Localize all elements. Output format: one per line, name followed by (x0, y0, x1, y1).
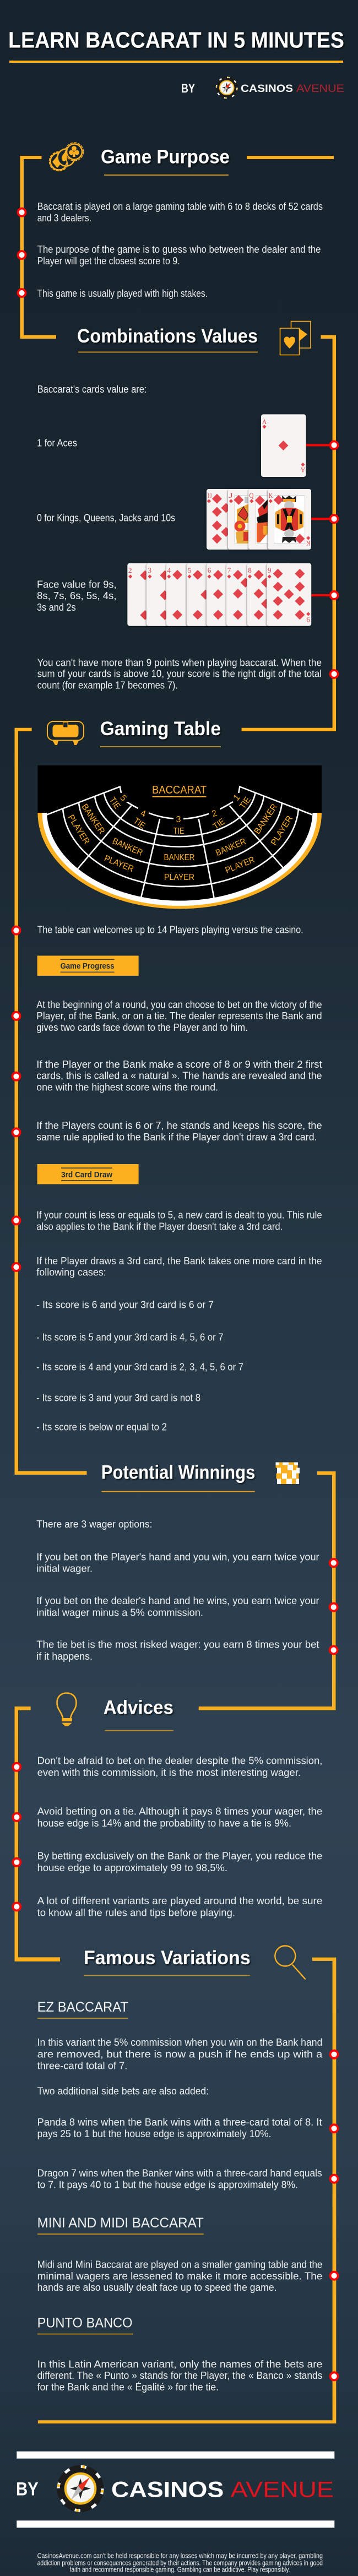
marker (13, 1903, 20, 1911)
table labels: TIE (173, 827, 185, 836)
paragraph: high stakes: This game is usually played with high stakes. (37, 288, 208, 299)
paragraph: nine points maximum: count (for example 17 becomes 7). (37, 680, 178, 691)
paragraph: variants (37, 1895, 322, 1919)
marker (330, 441, 338, 449)
paragraph: mini and midi rules (37, 2259, 322, 2293)
paragraph: beginning of a round: gives two cards face down to the Player and to him. (36, 1022, 248, 1033)
timeline frame: gaming table (14, 728, 87, 1475)
paragraph: bet on the dealer: Don't be afraid to bet on the dealer despite the 5% commission, (37, 1755, 322, 1766)
paragraph: dealer bet (36, 1595, 319, 1618)
panel: gaming table (12, 718, 322, 1475)
paragraph: panda 8: Panda 8 wins when the Bank wins with a three-card total of 8. It (37, 2117, 322, 2128)
footer logo band (16, 2452, 334, 2528)
marker (13, 1858, 20, 1866)
text: number cards: 3s and 2s (37, 602, 76, 613)
cards: ten, jack, queen, king of diamonds: 10 (207, 491, 211, 499)
text: number cards (37, 579, 117, 613)
cards: two to nine of diamonds: 5 (188, 566, 192, 574)
paragraph: variants: to know all the rules and tips before playing. (37, 1907, 235, 1919)
cards: two to nine of diamonds: 3 (148, 566, 151, 574)
cards: two to nine of diamonds (127, 563, 311, 626)
paragraph: dealer bet: initial wager minus a 5% commission. (36, 1607, 203, 1618)
timeline frame: combinations values (242, 335, 336, 731)
paragraph: avoid ties: house edge is 14% and the probability to have a tie is 9%. (37, 1818, 291, 1829)
subheading: punto banco: PUNTO BANCO (37, 2316, 132, 2331)
icon: poker chips (50, 143, 84, 171)
table labels: 4 (139, 808, 147, 819)
paragraph: mini and midi rules: minimal wagers are lessened to make it more accessible. The (37, 2270, 322, 2281)
paragraph: mini and midi rules: hands are also usually dealt face up to speed the game. (37, 2282, 276, 2293)
paragraph: house edge: By betting exclusively on the Bank or the Player, you reduce the (37, 1850, 322, 1861)
paragraph: table and decks: Baccarat is played on a large gaming table with 6 to 8 decks of 52 cards (37, 201, 323, 212)
paragraph: bank third card (36, 1256, 322, 1278)
paragraph: nine points maximum: You can't have more than 9 points when playing baccarat. When the (37, 657, 322, 668)
cards: two to nine of diamonds: 8 (248, 566, 252, 574)
footer logo band: AVENUE (231, 2477, 334, 2502)
icon: light bulb (57, 1693, 76, 1726)
paragraph: stand on six or seven: same rule applied to the Bank if the Player don't draw a 3rd card. (36, 1132, 317, 1143)
paragraph: player bet: initial wager. (36, 1563, 93, 1574)
marker (18, 289, 25, 297)
panel: combinations values (37, 322, 338, 731)
paragraph: punto banco rules: for the Bank and the « Égalité » for the tie. (37, 2382, 219, 2393)
card: ace of diamonds: A (300, 466, 305, 474)
paragraph: count five or less: also applies to the Bank if the Player doesn't take a 3rd card. (36, 1221, 283, 1232)
cards: two to nine of diamonds: 2 (128, 566, 132, 574)
marker (12, 1073, 20, 1080)
paragraph: mini and midi rules: Midi and Mini Baccarat are played on a smaller gaming table and the (37, 2259, 322, 2270)
button: game progress (37, 956, 139, 976)
paragraph: tie bet: The tie bet is the most risked wager: you earn 8 times your bet (36, 1639, 319, 1650)
table labels: TIE (211, 817, 227, 832)
paragraph: purpose: The purpose of the game is to guess who between the dealer and the (37, 244, 321, 255)
paragraph: punto banco rules: In this Latin American variant, only the names of the bets are (37, 2358, 322, 2370)
cards: two to nine of diamonds: 7 (227, 566, 231, 574)
timeline frame: game purpose (20, 156, 334, 339)
paragraph: table and decks: and 3 dealers. (37, 213, 91, 224)
paragraph: tie bet: if it happens. (36, 1651, 93, 1662)
paragraph: natural (36, 1059, 322, 1093)
paragraph: purpose (37, 244, 321, 267)
text: face cards: 0 for Kings, Queens, Jacks and 10s (37, 512, 175, 523)
cards: ten, jack, queen, king of diamonds: K (269, 491, 273, 499)
icon: two cards (280, 322, 311, 355)
paragraph: bet on the dealer: even with this commission, it is the most interesting wager. (37, 1767, 301, 1778)
disclaimer: faith and recommend responsible gaming. Gambling can be addictive. Play responsibly. (69, 2566, 290, 2574)
button: 3rd card draw (37, 1164, 139, 1184)
panel: game purpose (18, 143, 334, 339)
marker (13, 1813, 20, 1821)
paragraph: punto banco rules: different. The « Punto » stands for the Player, the « Banco » stands (37, 2370, 322, 2381)
panel: famous variations (37, 1946, 338, 2423)
heading: potential winnings: Potential Winnings (101, 1462, 255, 1483)
table labels: PLAYER (103, 854, 135, 874)
paragraph: natural: one with the highest score wins the round. (36, 1082, 218, 1093)
paragraph: EZ baccarat rules: are removed, but there is now a push if he ends up with a (37, 2049, 323, 2060)
connector (311, 594, 333, 596)
marker (12, 927, 20, 934)
cards: ten, jack, queen, king of diamonds: J (229, 491, 233, 499)
icon: magnifying glass (275, 1946, 306, 1979)
table labels: BANKER (79, 802, 106, 836)
disclaimer: CasinosAvenue.com can't be held responsible for any losses which may be incurred by any player, gambling (37, 2552, 323, 2559)
list: bank draw cases: - Its score is 4 and your 3rd card is 2, 3, 4, 5, 6 or 7 (36, 1362, 243, 1373)
paragraph: dragon 7: Dragon 7 wins when the Banker wins with a three-card hand equals (37, 2167, 322, 2178)
paragraph: count five or less: If your count is less or equals to 5, a new card is dealt to you. This rule (36, 1210, 322, 1221)
connector (311, 518, 333, 520)
text: wager options: There are 3 wager options: (36, 1519, 152, 1530)
card: ace of diamonds (261, 414, 306, 477)
heading: gaming table: Gaming Table (100, 718, 221, 740)
cards: ten, jack, queen, king of diamonds: Q (249, 491, 254, 499)
cards: two to nine of diamonds: 9 (268, 566, 271, 574)
marker (330, 2051, 338, 2058)
text: aces: 1 for Aces (37, 437, 77, 448)
marker (330, 1646, 338, 1654)
heading: famous variations: Famous Variations (84, 1947, 251, 1969)
header logo: by Casinos Avenue: BY (181, 81, 195, 95)
button: game progress: Game Progress (61, 961, 115, 971)
paragraph: bank third card: following cases: (36, 1267, 106, 1278)
table labels: TIE (132, 816, 147, 831)
header logo: by Casinos Avenue (181, 77, 344, 99)
paragraph: nine points maximum (37, 657, 322, 691)
paragraph: panda 8: pays 25 to 1 but the house edge is approximately 10%. (37, 2128, 271, 2139)
table labels: TIE (238, 795, 253, 811)
marker (330, 1559, 338, 1567)
header logo: by Casinos Avenue: CASINOS (241, 83, 293, 95)
heading: combinations values: Combinations Values (77, 325, 258, 347)
card: ace of diamonds: A (262, 417, 267, 426)
footer logo band: CASINOS (111, 2477, 224, 2502)
cards: two to nine of diamonds: 4 (167, 566, 171, 574)
table labels: PLAYER (269, 814, 295, 847)
footer logo band: BY (16, 2479, 39, 2500)
icon: chip stack (275, 1463, 300, 1484)
cards: ten, jack, queen, king of diamonds (207, 489, 311, 550)
paragraph: bank third card: If the Player draws a 3rd card, the Bank takes one more card in the (36, 1256, 322, 1267)
paragraph: natural: cards, this is called a « natural ». The hands are revealed and the (36, 1070, 322, 1082)
paragraph: tie bet (36, 1639, 319, 1662)
list: bank draw cases: - Its score is 6 and your 3rd card is 6 or 7 (36, 1300, 214, 1311)
disclaimer (37, 2552, 323, 2574)
paragraph: EZ baccarat rules (37, 2037, 323, 2071)
table labels: PLAYER (224, 855, 256, 876)
text: number cards: 8s, 7s, 6s, 5s, 4s, (37, 590, 117, 601)
paragraph: EZ baccarat rules: In this variant the 5% commission when you win on the Bank hand (37, 2037, 322, 2048)
timeline frame: potential winnings (199, 1471, 336, 1710)
list: bank draw cases: - Its score is 5 and your 3rd card is 4, 5, 6 or 7 (36, 1332, 224, 1343)
text: number cards: Face value for 9s, (37, 579, 117, 590)
text: cards value intro: Baccarat's cards value are: (37, 384, 147, 395)
marker (18, 208, 25, 216)
table lines (47, 787, 312, 898)
marker (12, 1012, 20, 1020)
list: bank draw cases: - Its score is below or equal to 2 (36, 1422, 167, 1433)
paragraph: player bet (36, 1552, 319, 1574)
marker (330, 1604, 338, 1611)
paragraph: dealer bet: If you bet on the dealer's hand and he wins, you earn twice your (36, 1595, 319, 1606)
table gaps behind seat numbers (121, 793, 241, 824)
table labels: 5 (118, 794, 128, 803)
table labels: PLAYER (164, 873, 194, 882)
heading: advices: Advices (104, 1697, 173, 1719)
marker (12, 1216, 20, 1224)
marker (330, 670, 338, 678)
marker (330, 2175, 338, 2183)
paragraph: table and decks (37, 201, 323, 224)
paragraph: natural: If the Player or the Bank make a score of 8 or 9 with their 2 first (36, 1059, 322, 1070)
header logo: by Casinos Avenue: AVENUE (296, 83, 344, 95)
paragraph: count five or less (36, 1210, 322, 1232)
subheading: mini and midi baccarat: MINI AND MIDI BACCARAT (37, 2215, 204, 2231)
paragraph: house edge: house edge to approximately 99 to 98,5%. (37, 1862, 227, 1873)
table labels: BANKER (111, 836, 144, 858)
table labels: 1 (232, 793, 242, 803)
paragraph: variants: A lot of different variants are played around the world, be sure (37, 1895, 322, 1906)
marker (330, 2372, 338, 2380)
marker (330, 2272, 338, 2280)
cards: two to nine of diamonds: 9 (306, 616, 310, 624)
table labels: 2 (210, 808, 219, 819)
paragraph: house edge (37, 1850, 322, 1873)
paragraph: panda 8 (37, 2117, 322, 2139)
cards: two to nine of diamonds: 6 (208, 566, 211, 574)
paragraph: beginning of a round: At the beginning of a round, you can choose to bet on the victory of the (36, 999, 322, 1010)
paragraph: stand on six or seven: If the Players count is 6 or 7, he stands and keeps his score, the (36, 1120, 322, 1131)
diagram: baccarat table layout (37, 765, 322, 909)
paragraph: players at the table: The table can welcomes up to 14 Players playing versus the casino. (37, 925, 303, 936)
paragraph: avoid ties: Avoid betting on a tie. Although it pays 8 times your wager, the (37, 1806, 322, 1817)
paragraph: dragon 7 (37, 2167, 322, 2190)
list: bank draw cases: - Its score is 3 and your 3rd card is not 8 (36, 1393, 200, 1404)
timeline frame: advices (14, 1707, 60, 1961)
marker (12, 1263, 20, 1271)
table labels: BACCARAT (152, 784, 207, 796)
timeline frame: famous variations (38, 1958, 336, 2423)
table labels: BANKER (214, 837, 247, 858)
connector (306, 444, 333, 446)
marker (13, 1763, 20, 1771)
icon: gaming table (47, 721, 84, 745)
panel: advices (13, 1693, 322, 1961)
cards: ten, jack, queen, king of diamonds: K (306, 539, 311, 547)
marker (18, 251, 25, 259)
paragraph: beginning of a round (36, 999, 322, 1033)
table labels (66, 784, 295, 882)
button: 3rd card draw: 3rd Card Draw (61, 1170, 112, 1180)
paragraph: purpose: Player will get the closest score to 9. (37, 256, 180, 267)
paragraph: punto banco rules (37, 2358, 322, 2393)
table labels: BANKER (253, 802, 279, 836)
text: side bets intro: Two additional side bets are also added: (37, 2085, 209, 2096)
table labels: BANKER (164, 853, 195, 862)
paragraph: EZ baccarat rules: three-card total of 7. (37, 2060, 127, 2071)
table labels: PLAYER (66, 813, 91, 846)
panel: potential winnings (36, 1462, 338, 1710)
paragraph: dragon 7: to 7. It pays 40 to 1 but the house edge is approximately 8%. (37, 2179, 298, 2190)
heading: game purpose: Game Purpose (101, 146, 230, 167)
subheading: EZ baccarat: EZ BACCARAT (37, 1999, 128, 2015)
table labels: 3 (176, 815, 181, 824)
paragraph: beginning of a round: Player, of the Bank, or on a tie. The dealer represents the Bank and (36, 1010, 322, 1021)
paragraph: stand on six or seven (36, 1120, 322, 1143)
paragraph: avoid ties (37, 1806, 322, 1829)
marker (330, 591, 338, 599)
paragraph: player bet: If you bet on the Player's hand and you win, you earn twice your (36, 1552, 319, 1563)
list: bank draw cases (36, 1300, 243, 1433)
table labels: TIE (107, 796, 122, 811)
marker (330, 2124, 338, 2132)
paragraph: nine points maximum: sum of your cards is above 10, your score is the right digit of the total (37, 669, 322, 680)
paragraph: bet on the dealer (37, 1755, 322, 1778)
marker (330, 515, 338, 523)
marker (12, 1128, 20, 1136)
